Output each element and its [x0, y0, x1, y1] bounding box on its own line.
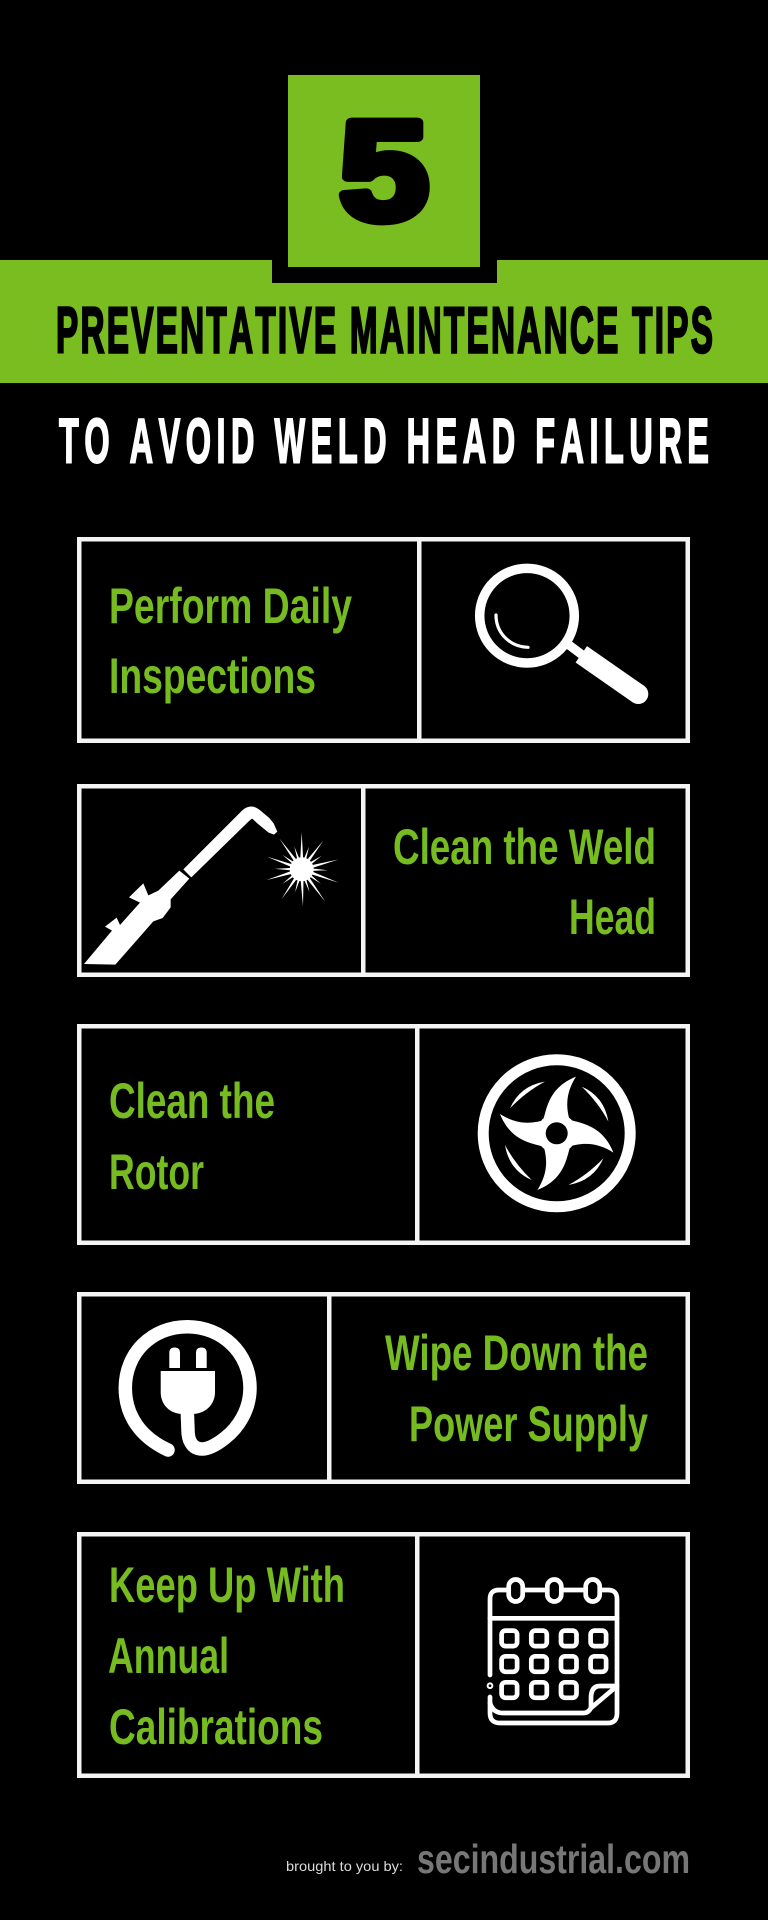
panel: wipe down the power supply [79, 1294, 688, 1482]
panel: clean the rotor [79, 1026, 688, 1243]
title: PREVENTATIVE MAINTENANCE TIPS [56, 293, 713, 366]
tip text: clean the weld head [393, 819, 656, 945]
icon: rotor fan [483, 1060, 630, 1207]
tip text: perform daily inspections: Perform Daily [109, 578, 352, 634]
tip text: keep up with annual calibrations: Calibrations [109, 1699, 323, 1755]
tip text: keep up with annual calibrations [108, 1557, 345, 1755]
tip text: clean the weld head: Head [569, 889, 656, 945]
panel: clean the weld head [79, 786, 688, 975]
tip text: perform daily inspections: Inspections [109, 648, 316, 704]
tip text: perform daily inspections [109, 578, 352, 704]
tip text: wipe down the power supply: Power Supply [409, 1396, 648, 1452]
header banner [0, 250, 768, 383]
tip text: clean the rotor: Clean the [109, 1073, 275, 1129]
tip text: keep up with annual calibrations: Annual [108, 1628, 229, 1684]
panel: keep up with annual calibrations [79, 1534, 688, 1776]
icon: welding torch [84, 806, 277, 965]
icon: magnifying glass [480, 568, 648, 704]
subtitle: TO AVOID WELD HEAD FAILURE [59, 406, 709, 476]
panel: perform daily inspections [79, 539, 688, 741]
icon: power plug [125, 1327, 250, 1450]
number badge [288, 75, 480, 267]
tip text: clean the rotor: Rotor [109, 1144, 204, 1200]
number badge: 5 [340, 92, 428, 249]
footer credit: brought to you by: [286, 1858, 403, 1874]
tip text: keep up with annual calibrations: Keep Up With [109, 1557, 345, 1613]
icon: calendar [489, 1580, 617, 1723]
tip text: clean the weld head: Clean the Weld [393, 819, 656, 875]
icon: weld spark [266, 832, 339, 906]
tip text: wipe down the power supply: Wipe Down the [385, 1325, 648, 1381]
tip text: wipe down the power supply [385, 1325, 648, 1452]
tip text: clean the rotor [109, 1073, 275, 1200]
footer credit: secindustrial.com [417, 1836, 690, 1882]
footer credit [286, 1836, 690, 1882]
